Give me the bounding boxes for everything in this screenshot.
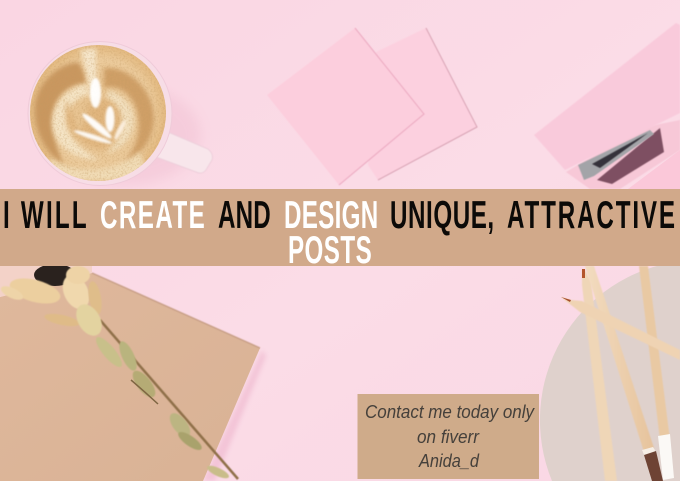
title line one: AND [218, 193, 271, 236]
photo: sticky notes [267, 28, 477, 185]
title line one [3, 193, 675, 236]
cup handle [156, 132, 212, 173]
title line one: ATTRACTIVE [507, 193, 675, 236]
dried branch [0, 264, 238, 481]
photo: kraft notebook with dried branch [0, 264, 266, 481]
pencil 2 [585, 266, 663, 481]
title line one: CREATE [100, 193, 205, 236]
contact text [365, 402, 535, 471]
title line one: DESIGN [284, 193, 378, 236]
contact text: on fiverr [417, 427, 480, 447]
back note [368, 28, 477, 180]
photo: coffee cup [28, 42, 212, 186]
front note [267, 28, 424, 185]
plate [540, 261, 680, 481]
cup rim [28, 42, 172, 186]
contact callout [358, 394, 539, 479]
title line two: POSTS [288, 228, 372, 271]
latte art [30, 45, 166, 181]
photo: plate with pencils [540, 261, 680, 481]
pencil 3 [639, 266, 674, 480]
pencil 1 [582, 269, 617, 481]
photo: pink stapler [534, 23, 680, 189]
title line one: UNIQUE, [390, 193, 494, 236]
coffee surface [30, 45, 166, 181]
contact text: Anida_d [418, 451, 480, 471]
title banner [0, 189, 680, 271]
pencil 4 [561, 297, 680, 360]
title line one: I WILL [3, 193, 87, 236]
contact text: Contact me today only [365, 402, 535, 422]
